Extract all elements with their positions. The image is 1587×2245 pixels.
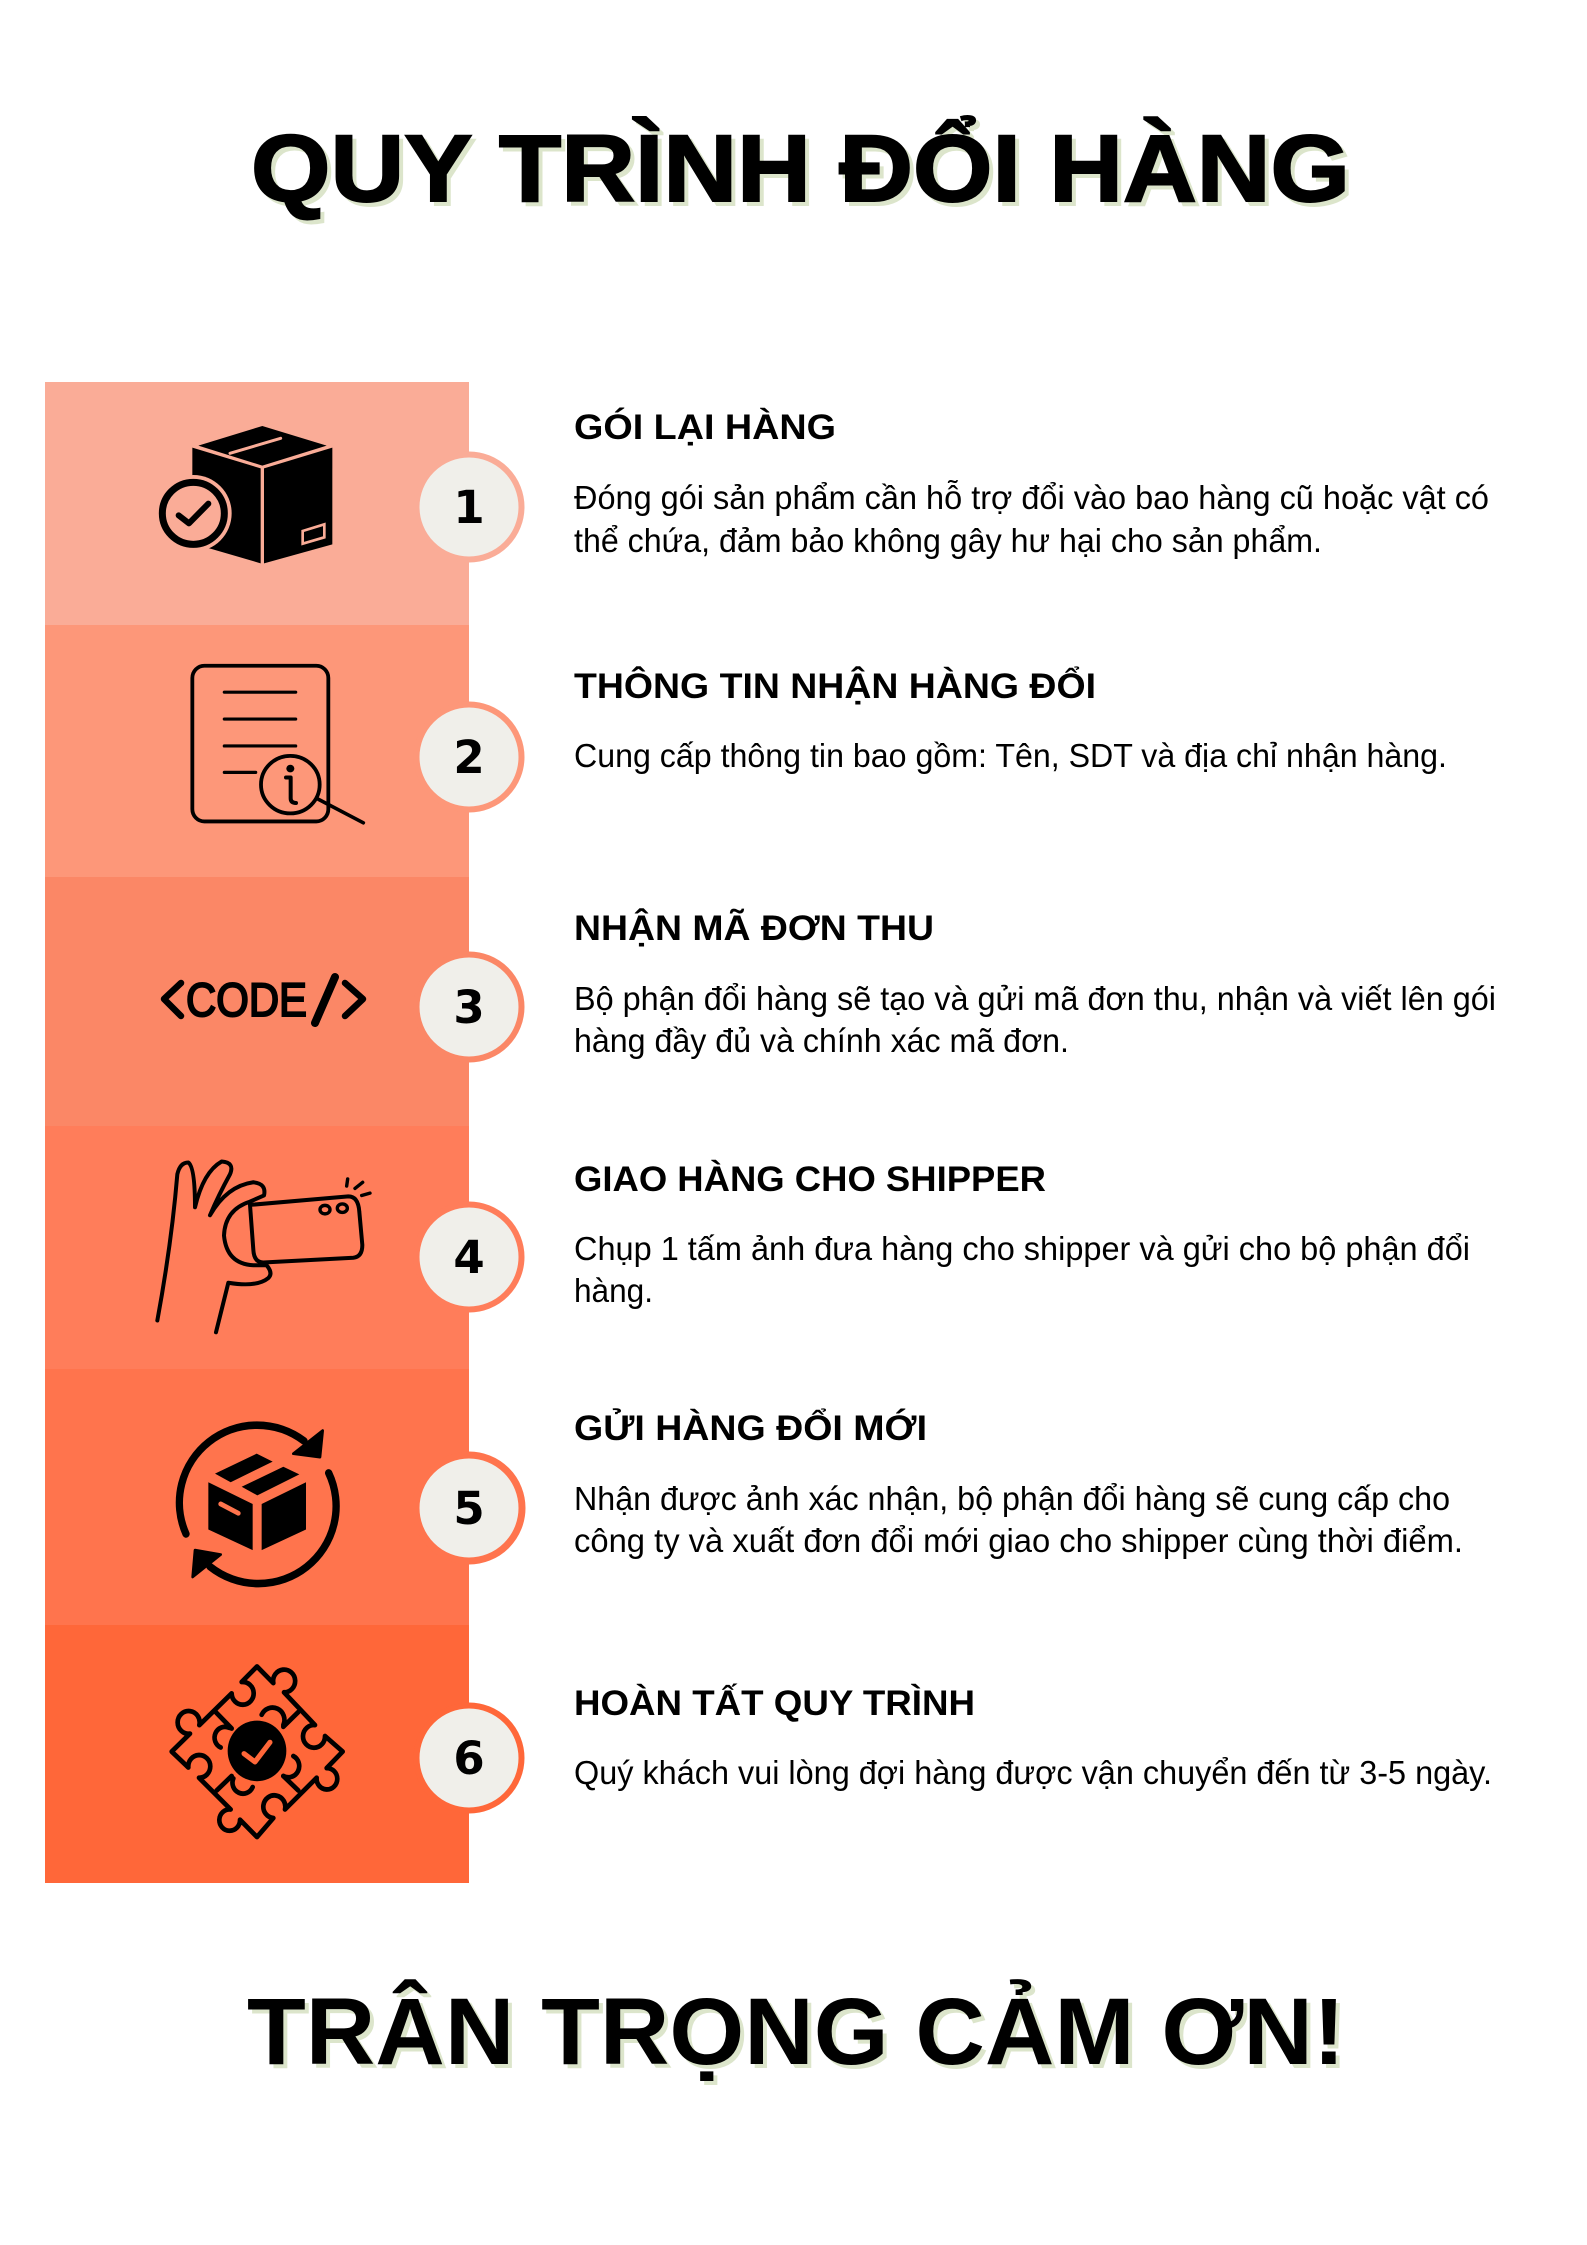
- text block: step 3: NHẬN MÃ ĐƠN THU: [574, 908, 934, 948]
- text block: step 4: GIAO HÀNG CHO SHIPPER: [574, 1159, 1046, 1199]
- step number 6: 6: [453, 1732, 485, 1785]
- text block: step 2: [574, 666, 1447, 774]
- step number 5: [416, 1455, 522, 1561]
- icon: document with magnifier: [192, 666, 363, 823]
- panel: step 4 colour band: [45, 1126, 469, 1369]
- text block: step 1: GÓI LẠI HÀNG: [574, 407, 836, 447]
- panel: step 3 colour band: [45, 877, 469, 1126]
- closing message: TRÂN TRỌNG CẢM ƠN!: [247, 1978, 1345, 2085]
- icon: puzzle with check: [172, 1667, 343, 1837]
- text block: step 4: hàng.: [574, 1272, 653, 1309]
- text block: step 3: Bộ phận đổi hàng sẽ tạo và gửi mã đơn thu, nhận và viết lên gói: [574, 980, 1496, 1017]
- panel: step 1 colour band: [45, 382, 469, 625]
- icon: code tag: [164, 973, 363, 1026]
- text block: step 1: [574, 407, 1489, 559]
- step number 2: 2: [453, 731, 485, 784]
- icon: box with check: [155, 426, 332, 563]
- step number 1: 1: [453, 481, 485, 534]
- text block: step 5: Nhận được ảnh xác nhận, bộ phận đổi hàng sẽ cung cấp cho: [574, 1480, 1450, 1517]
- panel: step 5 colour band: [45, 1369, 469, 1625]
- icon: code tag: CODE: [186, 973, 307, 1026]
- icon: box with exchange arrows: [179, 1425, 336, 1584]
- text block: step 6: HOÀN TẤT QUY TRÌNH: [574, 1683, 975, 1723]
- step number 4: 4: [453, 1231, 485, 1284]
- step number 6: [416, 1706, 522, 1810]
- panel: step 2 colour band: [45, 625, 469, 877]
- step number 3: [416, 954, 522, 1060]
- text block: step 3: hàng đầy đủ và chính xác mã đơn.: [574, 1022, 1069, 1059]
- panel: step 6 colour band: [45, 1625, 469, 1883]
- text block: step 5: công ty và xuất đơn đổi mới giao cho shipper cùng thời điểm.: [574, 1522, 1463, 1559]
- text block: step 6: [574, 1683, 1492, 1791]
- text block: step 4: Chụp 1 tấm ảnh đưa hàng cho shipper và gửi cho bộ phận đổi: [574, 1230, 1470, 1267]
- text block: step 1: Đóng gói sản phẩm cần hỗ trợ đổi vào bao hàng cũ hoặc vật có: [574, 479, 1489, 516]
- text block: step 3: [574, 908, 1496, 1059]
- text block: step 5: GỬI HÀNG ĐỔI MỚI: [574, 1408, 927, 1448]
- step number 1: [416, 454, 522, 560]
- step number 5: 5: [453, 1482, 485, 1535]
- step number 4: [416, 1204, 522, 1310]
- text block: step 2: THÔNG TIN NHẬN HÀNG ĐỔI: [574, 666, 1096, 706]
- title: QUY TRÌNH ĐỔI HÀNG: [251, 116, 1350, 222]
- text block: step 2: Cung cấp thông tin bao gồm: Tên, SDT và địa chỉ nhận hàng.: [574, 737, 1447, 774]
- text block: step 5: [574, 1408, 1463, 1559]
- text block: step 6: Quý khách vui lòng đợi hàng được vận chuyển đến từ 3-5 ngày.: [574, 1754, 1492, 1791]
- text block: step 4: [574, 1159, 1470, 1309]
- text block: step 1: thể chứa, đảm bảo không gây hư hại cho sản phẩm.: [574, 522, 1322, 559]
- icon: hand holding phone: [157, 1162, 370, 1332]
- step number 3: 3: [453, 981, 485, 1034]
- step number 2: [416, 704, 522, 810]
